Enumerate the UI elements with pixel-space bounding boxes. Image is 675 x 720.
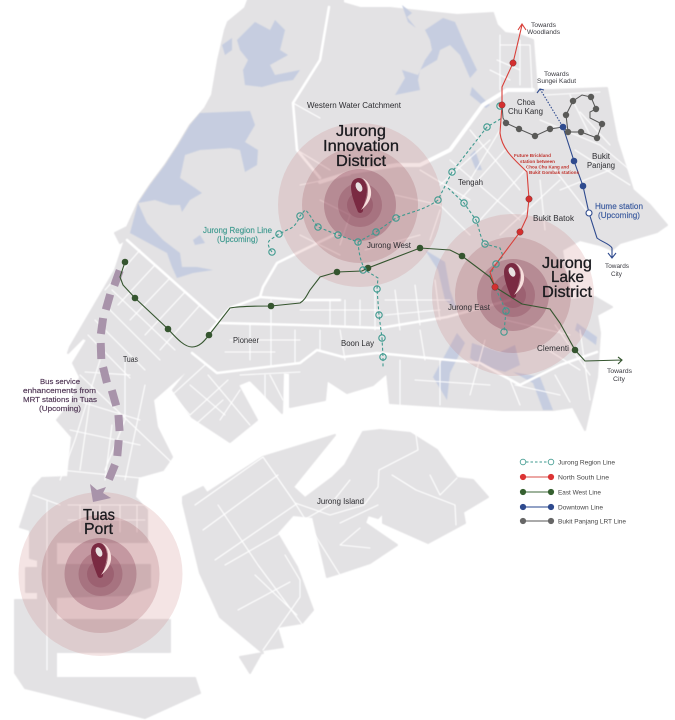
heading: Jurong Innovation District: Jurong xyxy=(336,123,386,140)
callout: bus service enhancements: (Upcoming) xyxy=(39,406,81,413)
place labels: Chu Kang xyxy=(508,107,543,116)
heading: Jurong Lake District xyxy=(542,255,593,301)
direction labels xyxy=(527,22,632,383)
icon: pin Tuas Port xyxy=(91,543,111,578)
direction labels: Towards xyxy=(607,368,632,375)
callout: Jurong Region Line: (Upcoming) xyxy=(217,235,258,244)
callout: Hume station: Hume station xyxy=(595,202,643,211)
callout: bus service enhancements xyxy=(23,379,98,413)
line: Downtown Line xyxy=(537,89,616,258)
line: Bukit Panjang LRT xyxy=(502,95,602,138)
place labels: Choa xyxy=(517,98,536,107)
place labels: Jurong West xyxy=(367,241,412,250)
place labels: Pioneer xyxy=(233,336,259,345)
legend: North South Line: North South Line xyxy=(558,474,609,482)
callout: bus service enhancements: Bus service xyxy=(40,379,80,386)
place labels: Western Water Catchment xyxy=(307,101,402,110)
place labels: Bukit Batok xyxy=(533,214,575,223)
direction labels: City xyxy=(613,376,626,383)
callout: Future Brickland station: Choa Chu Kang and xyxy=(526,164,569,170)
direction labels: City xyxy=(611,271,623,278)
place labels: Tuas xyxy=(123,355,138,364)
place labels xyxy=(123,98,615,506)
stations: East West Line xyxy=(122,245,578,353)
direction labels: Woodlands xyxy=(527,29,560,36)
legend xyxy=(520,459,626,526)
land: Jurong Island xyxy=(183,430,488,673)
line: East West Line xyxy=(120,248,622,364)
stations: Downtown Line xyxy=(560,124,592,216)
callout: Future Brickland station: station between xyxy=(520,159,555,164)
direction labels: Towards xyxy=(605,263,629,270)
circle group: Tuas Port xyxy=(18,492,182,656)
map: water bodies xyxy=(130,5,597,410)
circle group: Jurong Innovation District xyxy=(278,123,442,287)
callout: Future Brickland station: Bukit Gombak stations xyxy=(529,170,579,175)
stations: Bukit Panjang LRT xyxy=(503,94,605,141)
icon: pin Jurong Lake District xyxy=(504,263,524,298)
heading: Tuas Port xyxy=(83,507,115,538)
place labels: Jurong East xyxy=(448,303,491,312)
place labels: Panjang xyxy=(587,161,615,170)
direction labels: Sungei Kadut xyxy=(537,78,576,85)
stations: North South Line xyxy=(492,60,532,290)
callout: Future Brickland station: Future Brickland xyxy=(514,153,551,158)
stations: Jurong Region Line xyxy=(269,103,509,360)
callout: Future Brickland station xyxy=(514,153,579,175)
direction labels: Towards xyxy=(531,22,556,29)
heading: Jurong Lake District: Lake xyxy=(551,269,584,286)
legend: Downtown Line: Downtown Line xyxy=(558,504,603,512)
legend: East West Line: East West Line xyxy=(558,490,601,496)
place labels: Bukit xyxy=(592,152,611,161)
callout: Jurong Region Line: Jurong Region Line xyxy=(203,226,272,235)
legend: Jurong Region Line: Jurong Region Line xyxy=(558,460,615,466)
heading: Jurong Innovation District xyxy=(323,123,399,170)
direction labels: Towards xyxy=(544,71,569,78)
callout: bus service enhancements: MRT stations in Tuas xyxy=(23,397,98,404)
heading: Tuas Port: Port xyxy=(84,521,114,538)
circle group: Jurong Lake District xyxy=(432,214,594,376)
place labels: Clementi xyxy=(537,344,569,353)
icon: pin Jurong Innovation District xyxy=(351,178,371,213)
line: Jurong Region Line xyxy=(268,118,506,368)
bus service dashed arrow xyxy=(90,269,124,502)
place labels: Jurong Island xyxy=(317,497,364,506)
callout: bus service enhancements: enhancements from xyxy=(23,388,96,395)
heading: Jurong Lake District: District xyxy=(542,284,593,301)
callout: Jurong Region Line xyxy=(203,226,272,244)
heading: Jurong Lake District: Jurong xyxy=(542,255,592,272)
place labels: Tengah xyxy=(458,178,483,187)
arrowhead xyxy=(90,484,111,502)
line: North South Line xyxy=(490,24,529,287)
heading: Jurong Innovation District: Innovation xyxy=(323,138,399,155)
place labels: Boon Lay xyxy=(341,339,374,348)
heading: Tuas Port: Tuas xyxy=(83,507,115,524)
callout: Hume station: (Upcoming) xyxy=(598,211,640,220)
legend: Bukit Panjang LRT Line: Bukit Panjang LRT Line xyxy=(558,518,626,526)
callout: Hume station xyxy=(595,202,643,220)
heading: Jurong Innovation District: District xyxy=(336,153,387,170)
